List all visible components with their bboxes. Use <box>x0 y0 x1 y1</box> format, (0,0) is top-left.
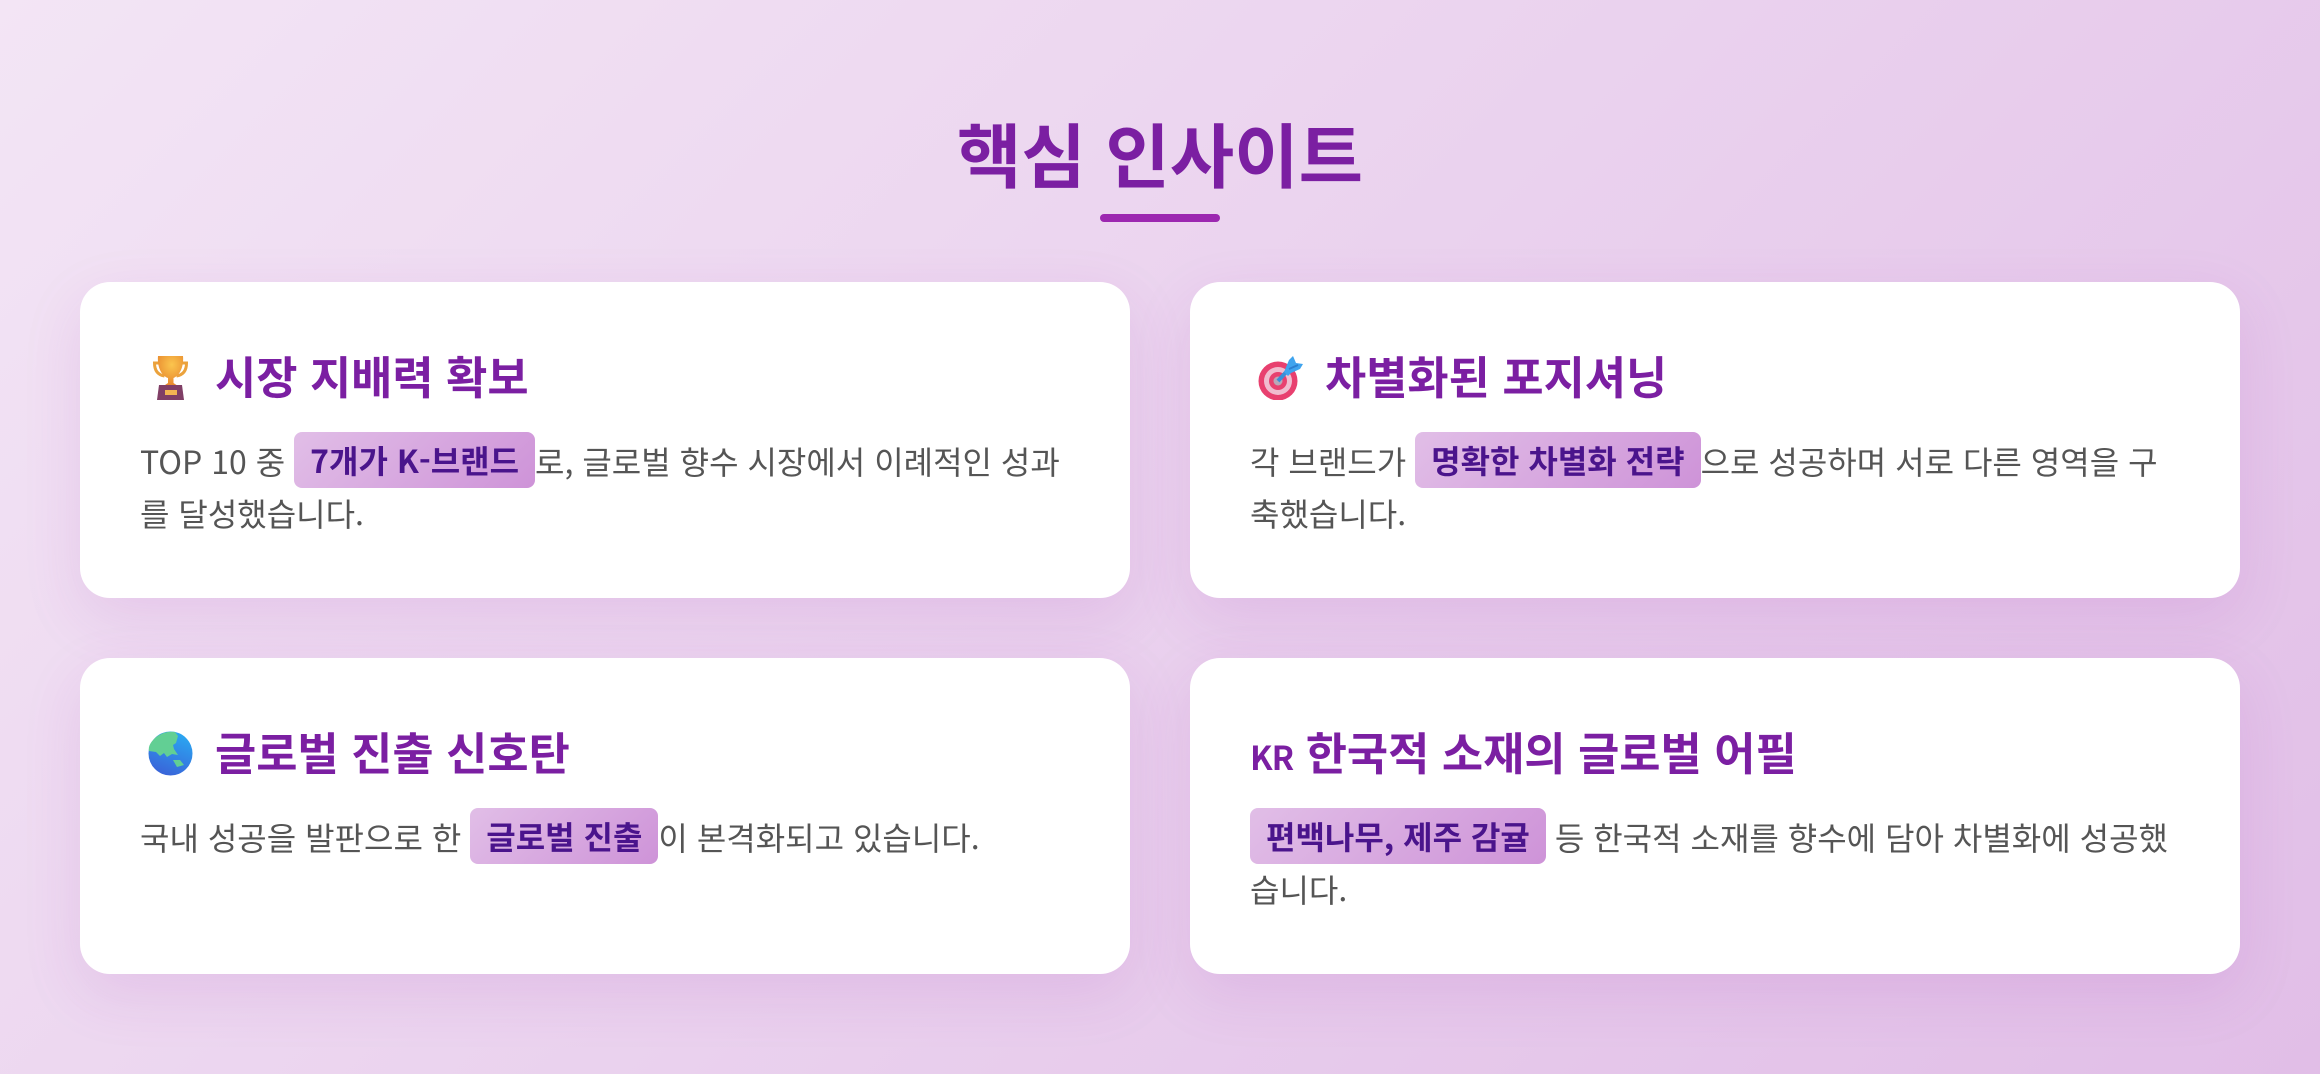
panel: differentiated positioning <box>1190 282 2240 598</box>
icon: target <box>1258 356 1303 400</box>
text: differentiated positioning: 각 브랜드가 으로 성공하며 서로 다른 영역을 구 <box>1250 438 2158 484</box>
heading: global expansion: 글로벌 진출 신호탄 <box>215 718 570 783</box>
text: korean ingredients <box>1250 808 2168 864</box>
title underline <box>1100 214 1220 222</box>
text: line two: 축했습니다. <box>1250 490 1406 536</box>
text: differentiated positioning: 명확한 차별화 전략 <box>1431 437 1685 483</box>
text: global expansion: 국내 성공을 발판으로 한 이 본격화되고 있습니다. <box>140 814 980 860</box>
icon: trophy <box>153 356 188 400</box>
heading: korean ingredients: KR 한국적 소재의 글로벌 어필 <box>1250 718 1797 783</box>
text: global expansion: 글로벌 진출 <box>486 813 642 859</box>
text: line two: 습니다. <box>1250 866 1347 912</box>
text: line two: 를 달성했습니다. <box>140 490 364 536</box>
text: korean ingredients: 편백나무, 제주 감귤 <box>1266 813 1530 859</box>
panel: korean ingredients <box>1190 658 2240 974</box>
heading: differentiated positioning: 차별화된 포지셔닝 <box>1325 342 1667 407</box>
text: market dominance: 7개가 K-브랜드 <box>310 437 519 483</box>
title: 핵심 인사이트 <box>957 102 1363 203</box>
panel: market dominance <box>80 282 1130 598</box>
heading: market dominance: 시장 지배력 확보 <box>215 342 529 407</box>
text: korean ingredients: 등 한국적 소재를 향수에 담아 차별화에 성공했 <box>1555 814 2168 860</box>
panel: global expansion <box>80 658 1130 974</box>
text: market dominance: TOP 10 중 로, 글로벌 향수 시장에서 이례적인 성과 <box>140 438 1060 484</box>
icon: globe <box>148 732 192 776</box>
